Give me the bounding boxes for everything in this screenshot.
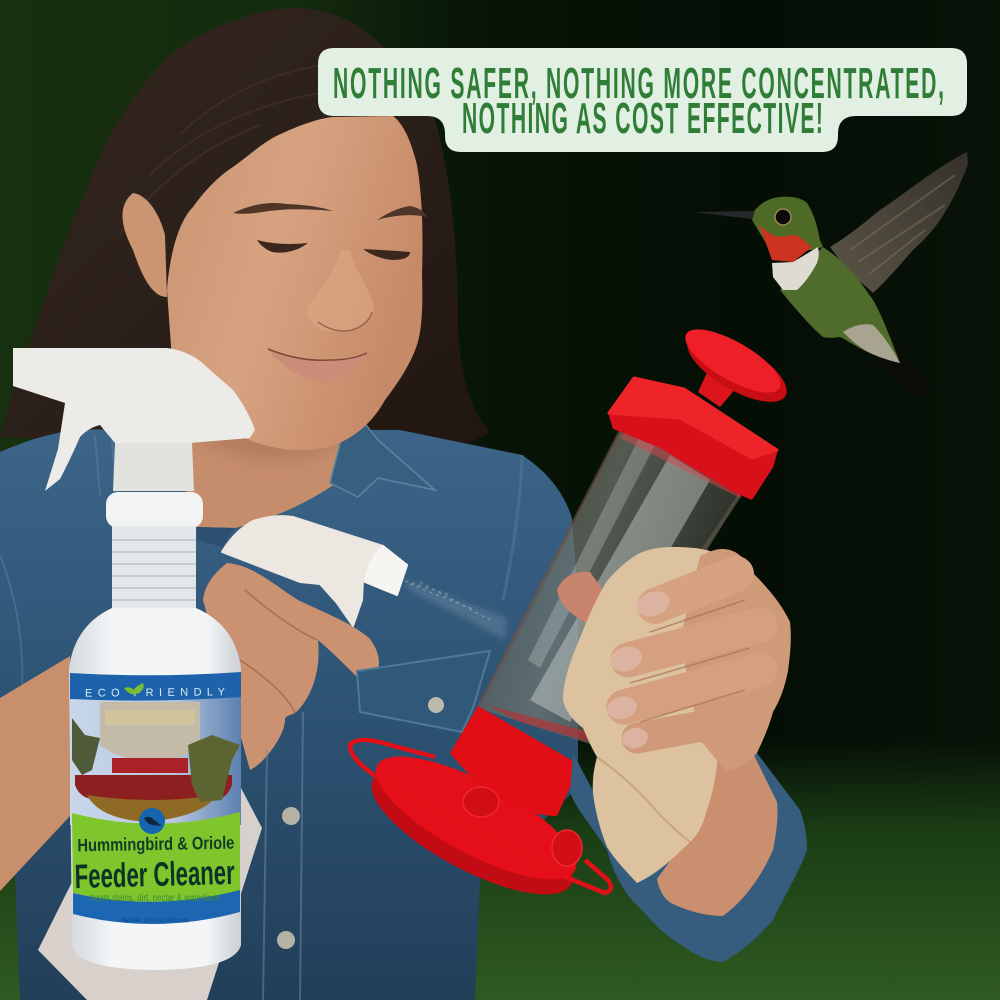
flange top bbox=[360, 734, 592, 902]
nose bbox=[307, 250, 374, 332]
thumb behind the tube bbox=[557, 572, 603, 625]
flange bbox=[75, 775, 232, 801]
green panel bbox=[72, 812, 240, 902]
cloth: beige microfiber bbox=[563, 547, 725, 883]
ribbed cap bbox=[113, 443, 194, 491]
left shirt seams bbox=[0, 435, 116, 690]
eco friendly: ECO FRIENDLY bbox=[85, 686, 226, 700]
finger 4 bbox=[637, 718, 745, 738]
card behind bottle bbox=[38, 786, 262, 1000]
collar bbox=[106, 492, 203, 528]
shoulder seam bbox=[503, 455, 522, 600]
badge bbox=[139, 808, 165, 834]
trigger head bbox=[13, 348, 255, 491]
net weight: NET WT. 16 FL OZ (473.1 ml) bbox=[122, 918, 188, 924]
spray bottle bbox=[13, 348, 255, 970]
placket lines bbox=[263, 712, 303, 1000]
eyebrows bbox=[233, 203, 333, 214]
right bird bbox=[188, 735, 240, 802]
red base bbox=[112, 758, 188, 773]
cap bbox=[611, 380, 775, 497]
nail 2 bbox=[607, 643, 645, 675]
collar bbox=[450, 706, 580, 816]
woman: neck bbox=[170, 400, 352, 528]
nail 3 bbox=[605, 694, 639, 722]
finger 1 bbox=[655, 574, 736, 606]
closed eyes bbox=[257, 240, 308, 253]
label bbox=[70, 672, 241, 924]
plunger knob bbox=[677, 318, 796, 415]
headline callout bbox=[318, 48, 967, 152]
pocket button bbox=[428, 697, 444, 713]
woman: hair bbox=[0, 8, 490, 470]
shirt pocket and buttons bbox=[263, 651, 490, 1000]
blue footer bbox=[73, 890, 240, 924]
feeding port 1 bbox=[463, 787, 499, 817]
body bbox=[780, 247, 900, 363]
finger 2 bbox=[628, 625, 760, 660]
smile bbox=[268, 349, 367, 383]
woman: face bbox=[122, 116, 427, 450]
head bbox=[752, 197, 823, 250]
badge bird bbox=[144, 817, 162, 826]
sleeve: rolled cuff bbox=[570, 753, 807, 962]
leaf icon bbox=[124, 683, 144, 694]
feeder: red base bbox=[350, 706, 611, 918]
feeding port 2 bbox=[552, 830, 582, 866]
flange rim bbox=[355, 746, 589, 918]
left bird bbox=[72, 718, 100, 775]
front button top bbox=[282, 807, 300, 825]
hand holding sprayer bbox=[203, 563, 379, 770]
wing bbox=[830, 152, 968, 293]
finger creases bbox=[630, 600, 750, 722]
ear bbox=[122, 193, 167, 297]
plunger stem bbox=[698, 360, 743, 407]
right hand bbox=[605, 549, 791, 770]
spray nozzle trigger bbox=[222, 516, 407, 626]
tagline: treats stains, dirt, nectar & waterlines bbox=[90, 893, 220, 904]
woman: denim shirt bbox=[0, 429, 578, 1000]
photo background bbox=[70, 695, 241, 825]
jar liquid band bbox=[105, 710, 195, 725]
feeder jar bbox=[100, 702, 200, 760]
product title: Hummingbird & Oriole bbox=[77, 833, 235, 855]
feeder: clear reservoir bbox=[478, 425, 743, 744]
nail 4 bbox=[620, 726, 650, 750]
spray mist bbox=[403, 580, 507, 640]
headline line 2: NOTHING AS COST EFFECTIVE! bbox=[462, 95, 823, 143]
headline line 1: NOTHING SAFER, NOTHING MORE CONCENTRATED, bbox=[333, 60, 944, 108]
finger 3 bbox=[624, 670, 760, 707]
tail bbox=[877, 337, 933, 397]
nail 1 bbox=[633, 587, 673, 621]
throat bbox=[758, 223, 812, 262]
feeder: red cap and plunger bbox=[609, 318, 796, 497]
beak bbox=[692, 211, 755, 219]
product name: Feeder Cleaner bbox=[74, 854, 235, 896]
front button bottom bbox=[277, 931, 295, 949]
vent bbox=[843, 324, 900, 363]
eye bbox=[775, 209, 791, 225]
dish bbox=[87, 795, 217, 822]
hanger ring bbox=[350, 740, 611, 893]
left forearm bbox=[0, 656, 70, 891]
label top band bbox=[70, 672, 241, 701]
ribbed neck bbox=[112, 526, 196, 610]
shirt collar bbox=[197, 405, 435, 547]
hummingbird bbox=[692, 152, 968, 397]
bottle body bbox=[69, 608, 241, 970]
white chest bbox=[772, 247, 819, 290]
forearm right bbox=[657, 753, 778, 916]
